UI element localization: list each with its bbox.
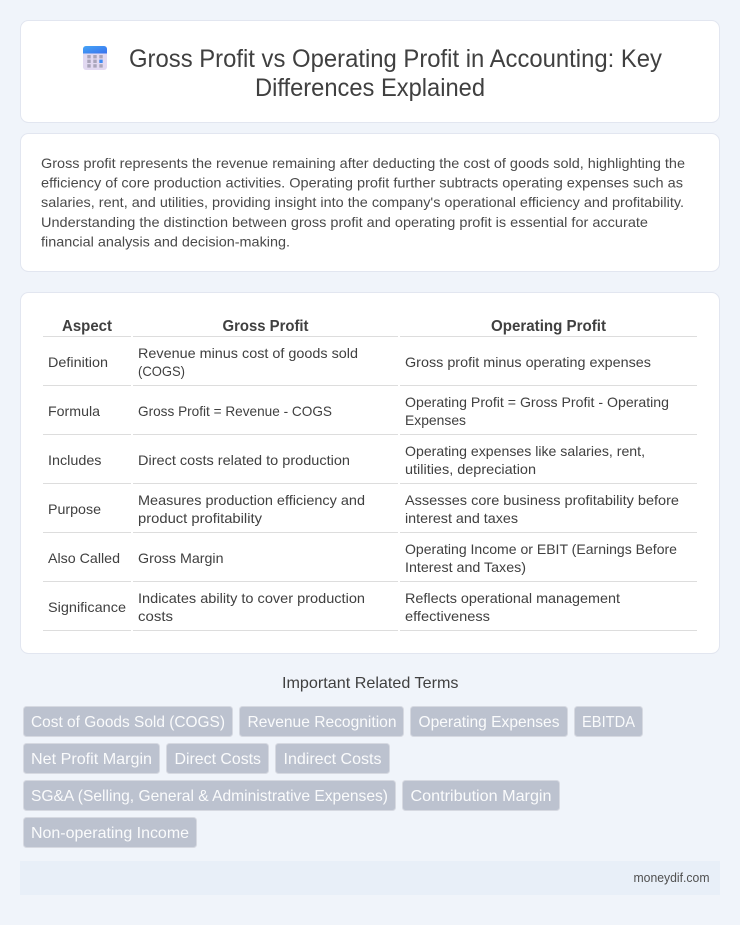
table row: Formula: Gross Profit = Revenue - COGS (138, 403, 332, 419)
table row: Significance (43, 590, 697, 631)
tag: EBITDA: EBITDA (582, 714, 635, 731)
tag: Net Profit Margin (24, 744, 160, 774)
table row: Also Called (43, 541, 697, 582)
heading: related terms: Important Related Terms (282, 675, 458, 692)
table row: Definition: Definition (48, 354, 108, 370)
footer: moneydif.com (634, 871, 710, 885)
table row: Also Called: Also Called (48, 550, 120, 566)
title: Gross Profit vs Operating Profit in Accounting: Key (129, 45, 662, 73)
table row: Includes: Direct costs related to production (138, 452, 350, 468)
title (129, 45, 662, 102)
table row: Definition: Revenue minus cost of goods sold (138, 345, 358, 361)
tag: Revenue Recognition: Revenue Recognition (248, 714, 396, 731)
table row: Significance: Indicates ability to cover production (138, 590, 365, 606)
tag: EBITDA (574, 706, 642, 736)
tag: Non-operating Income: Non-operating Income (31, 825, 189, 842)
table header row: Aspect (62, 318, 113, 335)
tag: Indirect Costs: Indirect Costs (284, 751, 382, 768)
table header row: Gross Profit (222, 318, 309, 335)
panel: summary paragraph: Understanding the distinction between gross profit and operating profit is essential for accurate (41, 214, 648, 230)
tag: Operating Expenses: Operating Expenses (418, 714, 560, 731)
tag: Cost of Goods Sold (24, 706, 232, 736)
table row: Definition: Gross profit minus operating expenses (405, 354, 651, 370)
panel: summary paragraph: efficiency of core production activities. Operating profit further subtracts operating expenses such as (41, 175, 683, 191)
tag: Indirect Costs (276, 744, 390, 774)
table row: Purpose: Measures production efficiency and (138, 492, 365, 508)
table row: Significance: effectiveness (405, 608, 490, 624)
table row: Formula: Formula (48, 403, 100, 419)
tag: SG&A: SG&A (Selling, General & Administrative Expenses) (31, 788, 388, 805)
tag: Non-operating Income (24, 818, 196, 848)
table row: Significance: costs (138, 608, 173, 624)
footer (20, 861, 720, 895)
table row: Formula: Operating Profit = Gross Profit - Operating (405, 394, 669, 410)
panel: comparison table (20, 292, 720, 654)
tag: Net Profit Margin: Net Profit Margin (31, 751, 152, 768)
table row: Includes: Operating expenses like salaries, rent, (405, 443, 645, 459)
panel: summary paragraph: financial analysis and decision-making. (41, 233, 290, 249)
table row: Purpose: Assesses core business profitability before (405, 492, 679, 508)
table row: Also Called: Gross Margin (138, 550, 224, 566)
panel: related term tags (24, 706, 642, 848)
tag: Contribution Margin: Contribution Margin (410, 788, 552, 805)
table row: Definition (43, 345, 697, 386)
panel: header (20, 20, 720, 122)
table row: Formula (43, 394, 697, 435)
table row: Formula: Expenses (405, 412, 466, 428)
table row: Purpose: product profitability (138, 510, 262, 526)
title: Differences Explained (255, 74, 485, 102)
tag: Direct Costs: Direct Costs (174, 751, 261, 768)
table row: Significance: Reflects operational management (405, 590, 620, 606)
panel: summary paragraph: Gross profit represents the revenue remaining after deducting the cost of goods sold, highlighting the (41, 155, 685, 171)
tag: SG&A (24, 780, 396, 810)
table row: Also Called: Interest and Taxes) (405, 559, 526, 575)
table row: Definition: (COGS) (138, 363, 185, 379)
table row: Includes: utilities, depreciation (405, 461, 536, 477)
table row: Purpose: interest and taxes (405, 510, 518, 526)
table row: Purpose: Purpose (48, 501, 101, 517)
panel: summary paragraph: salaries, rent, and utilities, providing insight into the company's operational efficiency and profitability. (41, 194, 684, 210)
panel: summary paragraph (20, 134, 720, 272)
table header row: Operating Profit (491, 318, 607, 335)
table row: Includes: Includes (48, 452, 102, 468)
tag: Contribution Margin (402, 780, 560, 810)
table row: Includes (43, 443, 697, 484)
table row: Purpose (43, 492, 697, 533)
table row: Significance: Significance (48, 599, 126, 615)
tag: Direct Costs (166, 744, 268, 774)
tag: Cost of Goods Sold: Cost of Goods Sold (COGS) (31, 714, 225, 731)
table header row (43, 318, 697, 337)
icon: calendar (83, 46, 107, 70)
tag: Revenue Recognition (240, 706, 404, 736)
table row: Also Called: Operating Income or EBIT (Earnings Before (405, 541, 677, 557)
tag: Operating Expenses (410, 706, 568, 736)
